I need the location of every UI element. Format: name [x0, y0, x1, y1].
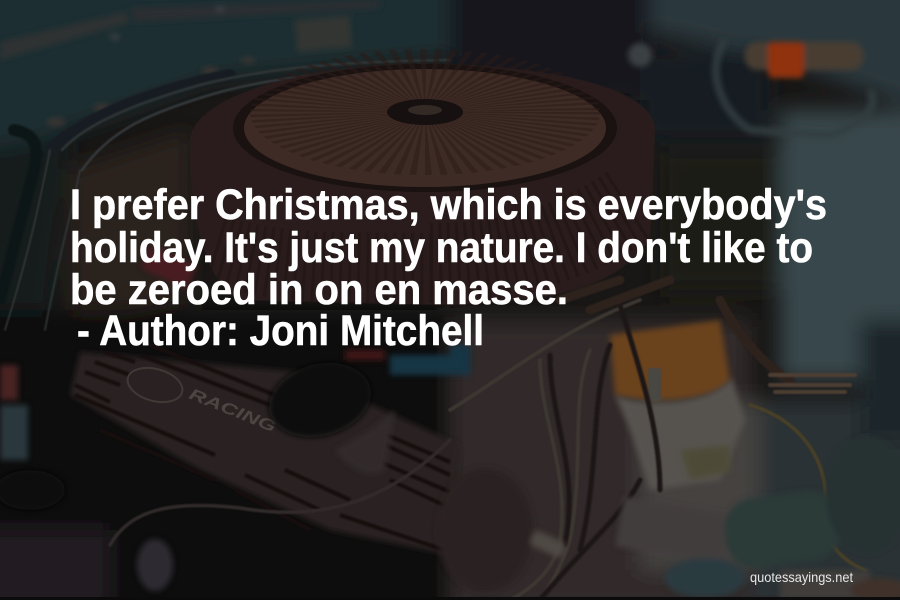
wire boots and clamps: [137, 437, 900, 600]
air filter housing: [190, 64, 655, 305]
quote line 1: I prefer Christmas, which is everybody's: [70, 181, 827, 229]
housing body: [190, 64, 655, 305]
blue and red fittings: [0, 245, 470, 510]
oil cap: [260, 352, 380, 448]
author attribution: - Author: Joni Mitchell: [77, 307, 484, 355]
ribbed side: [430, 205, 630, 263]
frame rail curves: [0, 60, 450, 330]
distributor cap: [610, 320, 745, 490]
pleated filter top: [244, 69, 606, 187]
watermark: quotessayings.net: [750, 569, 853, 585]
pleats: [325, 76, 525, 148]
valve cover with ribs: [70, 345, 460, 555]
hood panel highlights: [0, 0, 380, 126]
oval badge: [124, 362, 186, 408]
red cap top right: [628, 40, 873, 135]
quote text: [70, 181, 827, 355]
RACING emboss: RACING: [187, 386, 278, 436]
spark plug wires: [110, 280, 865, 600]
rim ring: [233, 64, 617, 192]
centre nut: [387, 99, 463, 125]
quote line 2: holiday. It's just my nature. I don't like to: [70, 224, 813, 272]
quote line 3: be zeroed in on en masse.: [70, 266, 568, 314]
dark bottom edge: [0, 597, 900, 600]
